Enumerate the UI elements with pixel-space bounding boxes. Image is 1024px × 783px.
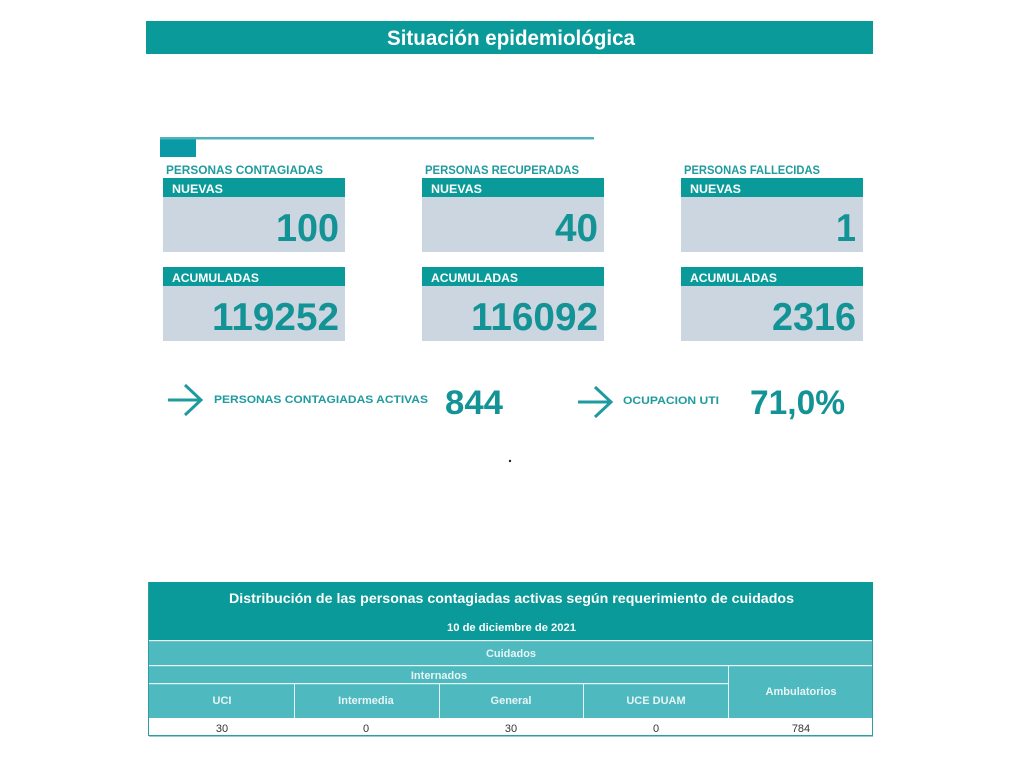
table column headers: General xyxy=(491,695,531,707)
table column headers xyxy=(149,640,873,718)
table column headers: Ambulatorios xyxy=(766,686,836,698)
table: distribución de personas contagiadas activas xyxy=(148,582,873,736)
icon: arrow active cases xyxy=(168,385,201,415)
title banner xyxy=(146,21,873,54)
table column headers: UCE DUAM xyxy=(626,695,686,707)
panel: personas contagiadas: 100 xyxy=(276,207,339,250)
table data row: 0 xyxy=(363,723,369,735)
table data row: 784 xyxy=(792,723,810,735)
table header: 10 de diciembre de 2021 xyxy=(447,622,576,634)
panel: personas fallecidas: 2316 xyxy=(772,296,856,339)
panel: personas recuperadas: ACUMULADAS xyxy=(431,271,518,285)
table data row xyxy=(148,582,873,736)
panel: personas fallecidas: 1 xyxy=(836,207,856,250)
panel: personas contagiadas: 119252 xyxy=(212,296,339,339)
panel: personas fallecidas xyxy=(681,163,863,341)
section marker line xyxy=(160,137,594,157)
table data row: 30 xyxy=(216,723,228,735)
stat: personas contagiadas activas xyxy=(214,384,503,422)
table column headers: UCI xyxy=(213,695,231,707)
stat: ocupacion UTI xyxy=(623,384,845,422)
table header: Distribución de las personas contagiadas activas según requerimiento de cuidados xyxy=(229,590,794,606)
dot xyxy=(509,460,511,462)
table column headers: Internados xyxy=(411,670,467,682)
panel: personas contagiadas: PERSONAS CONTAGIADAS xyxy=(166,163,323,177)
table header xyxy=(149,582,873,640)
panel: personas recuperadas: PERSONAS RECUPERADAS xyxy=(425,163,579,177)
table data row: 0 xyxy=(653,723,659,735)
panel: personas recuperadas: NUEVAS xyxy=(431,182,482,196)
table column headers: Cuidados xyxy=(486,648,536,660)
table column headers: Intermedia xyxy=(338,695,395,707)
stat: personas contagiadas activas: PERSONAS CONTAGIADAS ACTIVAS xyxy=(214,394,428,406)
panel: personas recuperadas: 116092 xyxy=(471,296,598,339)
icon: arrow UTI occupancy xyxy=(578,387,611,417)
title banner: Situación epidemiológica xyxy=(387,27,635,50)
panel: personas recuperadas xyxy=(422,163,604,341)
panel: personas fallecidas: ACUMULADAS xyxy=(690,271,777,285)
table data row: 30 xyxy=(505,723,517,735)
panel: personas contagiadas xyxy=(163,163,345,341)
stat: ocupacion UTI: OCUPACION UTI xyxy=(623,395,719,407)
stat: ocupacion UTI: 71,0% xyxy=(750,384,845,422)
panel: personas contagiadas: NUEVAS xyxy=(172,182,223,196)
stat: personas contagiadas activas: 844 xyxy=(445,384,503,422)
panel: personas fallecidas: NUEVAS xyxy=(690,182,741,196)
panel: personas fallecidas: PERSONAS FALLECIDAS xyxy=(684,163,820,177)
panel: personas contagiadas: ACUMULADAS xyxy=(172,271,259,285)
panel: personas recuperadas: 40 xyxy=(555,207,598,250)
